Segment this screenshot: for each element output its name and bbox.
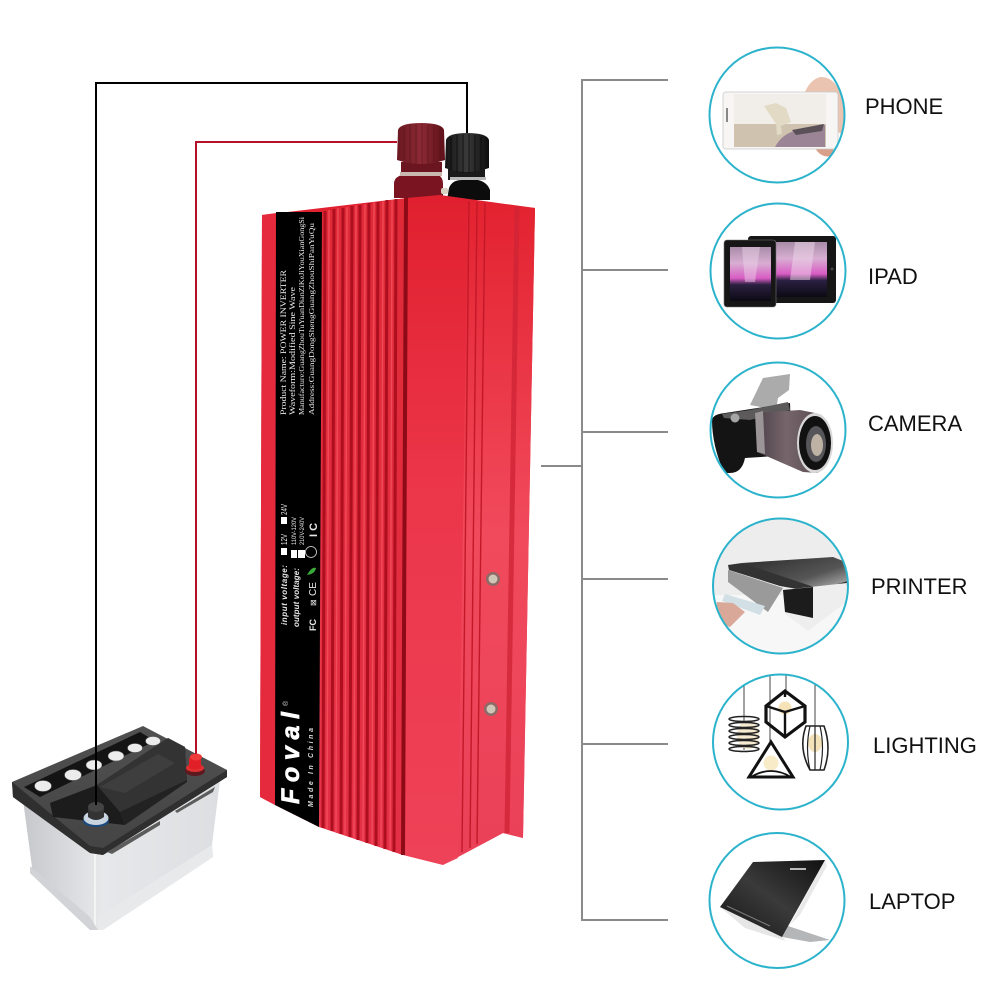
label: CAMERA — [868, 411, 962, 436]
wire: black — [96, 83, 467, 805]
device: printer — [710, 515, 968, 655]
battery lid — [12, 726, 227, 855]
certification marks: ⊠ — [309, 599, 318, 606]
black label panel — [275, 212, 322, 827]
inverter body — [260, 195, 535, 865]
negative post — [83, 802, 109, 827]
certification marks: CE — [308, 582, 319, 596]
voltage text: 24V — [280, 503, 289, 515]
brand logo: Foval — [277, 711, 305, 804]
product info text: Product Name: POWER INVERTER — [279, 269, 288, 415]
device: lighting — [713, 674, 977, 810]
voltage text — [280, 503, 306, 627]
positive post — [185, 754, 205, 776]
product info text: Waveform:Modified Sine Wave — [288, 286, 297, 415]
label: PRINTER — [871, 574, 968, 599]
terminal: red — [394, 123, 445, 198]
voltage text: 110V-120V — [291, 516, 298, 545]
label: PHONE — [865, 94, 943, 119]
circle outline — [710, 204, 846, 338]
voltage text: input voltage: — [280, 565, 289, 625]
terminal: black — [441, 133, 490, 200]
device: phone — [710, 48, 943, 182]
voltage text: output voltage: — [292, 568, 301, 627]
product info text: Manufacture:GuangZhouTuYuanDianZiKeJiYouXianGongSi — [298, 217, 306, 415]
icon: pendant lights — [729, 675, 828, 777]
certification marks: I C — [308, 523, 320, 537]
made in china: Made In China — [308, 728, 315, 807]
product info text — [279, 217, 316, 415]
product info text: Address:GuangDongShengGuangZhouShiPanYuQu — [308, 222, 316, 415]
side panel — [443, 200, 535, 865]
wire: red — [196, 142, 397, 754]
power inverter — [260, 123, 535, 865]
registered mark: ® — [282, 700, 290, 706]
certification marks — [306, 523, 320, 631]
circle outline — [710, 362, 846, 498]
battery case — [23, 780, 220, 930]
cooling fins — [320, 198, 406, 855]
icon: phone — [723, 77, 848, 156]
label: LIGHTING — [873, 733, 977, 758]
label: IPAD — [868, 264, 918, 289]
device: camera — [710, 362, 962, 498]
battery caps — [34, 736, 160, 792]
bracket connector lines — [541, 80, 668, 920]
left edge strip — [260, 213, 276, 805]
circle outline — [710, 48, 844, 182]
voltage text: 210V-240V — [299, 516, 306, 545]
circle outline — [710, 833, 844, 968]
circle outline — [713, 674, 848, 810]
icon: laptop — [720, 860, 830, 942]
device: laptop — [710, 833, 955, 968]
battery — [12, 726, 227, 930]
circle outline — [713, 518, 848, 654]
voltage text: 12V — [280, 533, 289, 545]
screws — [484, 572, 500, 716]
icon: tablets — [724, 236, 836, 307]
icon: printer — [714, 520, 847, 631]
label: LAPTOP — [869, 889, 955, 914]
device: ipad — [710, 204, 918, 338]
icon: camera — [712, 374, 833, 473]
certification marks: FC — [308, 619, 318, 631]
